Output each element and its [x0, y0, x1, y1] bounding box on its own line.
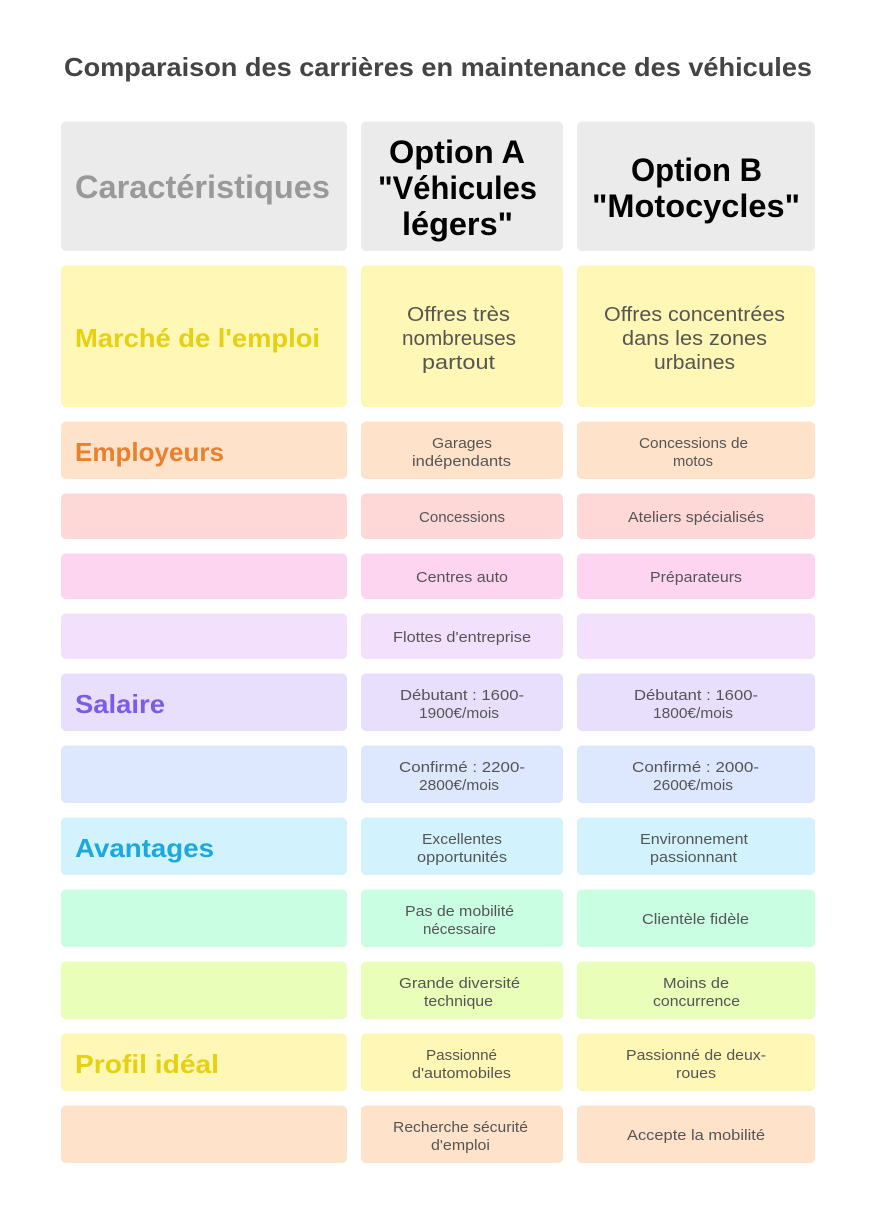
row: Employeurs 2: Ateliers spécialisés [628, 509, 764, 526]
row: Employeurs 1: motos [673, 453, 713, 470]
row: Employeurs 4 [61, 614, 815, 659]
row: Employeurs 3: Préparateurs [650, 569, 742, 586]
row: Salaire débutant: Salaire [75, 689, 165, 719]
row: Employeurs 1 [61, 422, 815, 479]
row: Salaire confirmé: Confirmé : 2200- [399, 759, 525, 776]
row: Profil idéal 1: Passionné de deux- [626, 1047, 766, 1064]
row: Marché de l'emploi: urbaines [654, 352, 735, 374]
table [61, 122, 815, 1163]
header: Option A [361, 122, 563, 251]
row: Profil idéal 1: Passionné [426, 1047, 497, 1064]
row: Salaire confirmé: Confirmé : 2000- [632, 759, 759, 776]
row: Employeurs 1: Concessions de [639, 435, 748, 452]
row: Employeurs 1: Garages [432, 435, 492, 452]
row: Avantages 3: Moins de [663, 975, 729, 992]
row: Avantages 1: passionnant [650, 849, 738, 866]
header: Option A: légers" [402, 206, 513, 242]
header row [61, 122, 815, 251]
row: Avantages 1 [61, 818, 815, 875]
row: Avantages 3 [61, 962, 815, 1019]
row: Avantages 2: Clientèle fidèle [642, 911, 749, 928]
row: Avantages 2: nécessaire [423, 921, 496, 938]
row: Profil idéal 2: Recherche sécurité [393, 1119, 528, 1136]
row: Avantages 2: Pas de mobilité [405, 903, 514, 920]
row: Employeurs 3 [61, 554, 815, 599]
row: Employeurs 3: Centres auto [416, 569, 508, 586]
row: Avantages 3: concurrence [653, 993, 740, 1010]
row: Employeurs 2 [61, 494, 815, 539]
header: Option A: "Véhicules [378, 170, 537, 206]
header: Option B: "Motocycles" [592, 188, 800, 224]
row: Avantages 3: technique [424, 993, 493, 1010]
row: Profil idéal 1: roues [676, 1065, 716, 1082]
title: Comparaison des carrières en maintenance des véhicules [64, 52, 812, 82]
row: Profil idéal 1: d'automobiles [412, 1065, 511, 1082]
row: Marché de l'emploi: partout [422, 352, 496, 374]
row: Marché de l'emploi: Marché de l'emploi [75, 323, 320, 353]
row: Marché de l'emploi: nombreuses [402, 328, 516, 350]
header: Caractéristiques [61, 122, 347, 251]
row: Marché de l'emploi: dans les zones [622, 328, 767, 350]
row: Employeurs 2: Concessions [419, 509, 505, 526]
row: Salaire confirmé: 2800€/mois [419, 777, 499, 794]
header: Option B [577, 122, 815, 251]
row: Profil idéal 1: Profil idéal [75, 1049, 219, 1079]
row: Salaire débutant: Débutant : 1600- [400, 687, 524, 704]
row: Marché de l'emploi: Offres très [407, 304, 510, 326]
row: Salaire débutant: Débutant : 1600- [634, 687, 758, 704]
row: Salaire débutant [61, 674, 815, 731]
row: Employeurs 1: Employeurs [75, 437, 224, 467]
row: Avantages 1: Environnement [640, 831, 749, 848]
row: Avantages 1: Excellentes [422, 831, 502, 848]
row: Avantages 1: opportunités [417, 849, 507, 866]
row: Avantages 1: Avantages [75, 833, 214, 863]
row: Avantages 3: Grande diversité [399, 975, 520, 992]
header: Caractéristiques: Caractéristiques [75, 169, 330, 205]
row: Avantages 2 [61, 890, 815, 947]
row: Profil idéal 1 [61, 1034, 815, 1091]
row: Profil idéal 2: Accepte la mobilité [627, 1127, 765, 1144]
row: Salaire débutant: 1900€/mois [419, 705, 499, 722]
row: Marché de l'emploi [61, 266, 815, 407]
row: Profil idéal 2: d'emploi [431, 1137, 490, 1154]
header: Option A: Option A [389, 134, 525, 170]
row: Employeurs 4: Flottes d'entreprise [393, 629, 531, 646]
row: Salaire confirmé [61, 746, 815, 803]
row: Profil idéal 2 [61, 1106, 815, 1163]
row: Salaire débutant: 1800€/mois [653, 705, 733, 722]
header: Option B: Option B [631, 152, 762, 188]
row: Employeurs 1: indépendants [412, 453, 511, 470]
row: Marché de l'emploi: Offres concentrées [604, 304, 785, 326]
row: Salaire confirmé: 2600€/mois [653, 777, 733, 794]
